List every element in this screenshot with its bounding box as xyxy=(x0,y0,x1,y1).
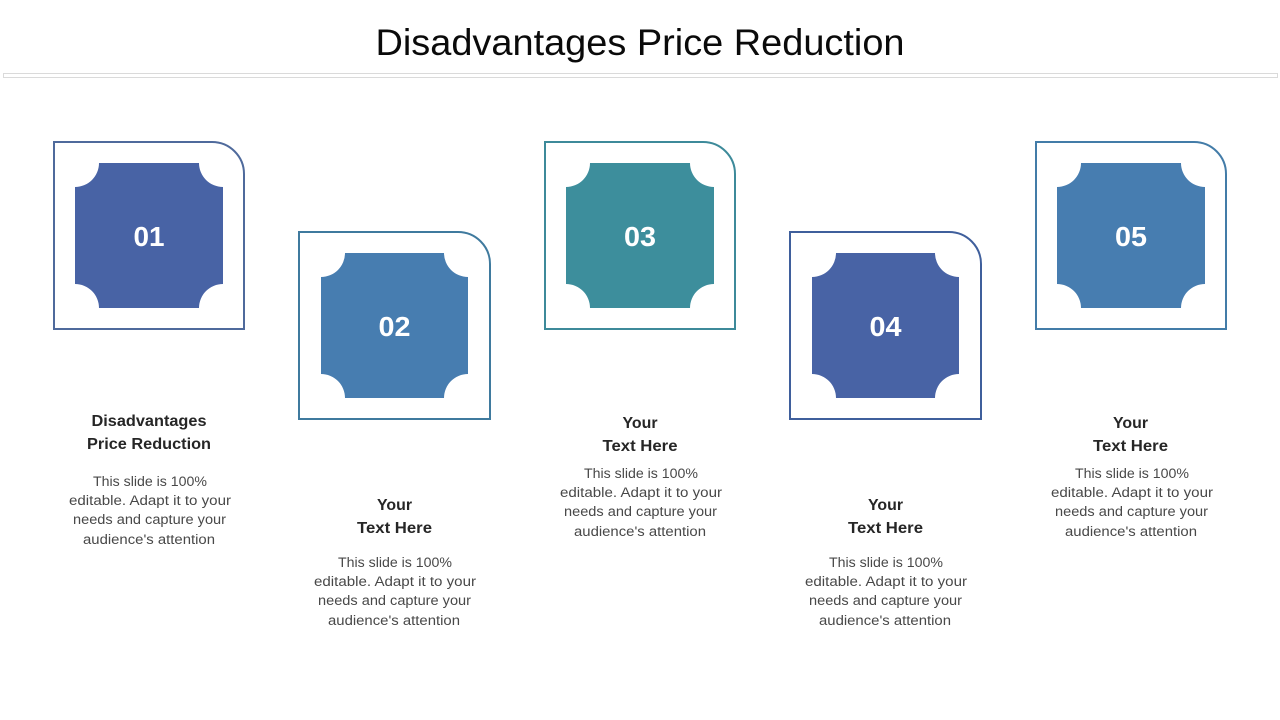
body: step 03: This slide is 100% xyxy=(584,466,698,481)
body: step 04: This slide is 100% xyxy=(829,555,943,570)
heading: step 05 xyxy=(1093,415,1168,455)
badge: step 04 xyxy=(812,253,959,398)
text block: step 02 xyxy=(314,497,477,628)
heading: step 02 xyxy=(357,497,432,537)
badge: step 03 xyxy=(566,163,714,308)
heading: step 02: Your xyxy=(377,497,412,514)
body: step 01: needs and capture your xyxy=(73,512,227,527)
title: Disadvantages Price Reduction xyxy=(376,22,904,63)
number: 03: 03 xyxy=(624,221,656,252)
body: step 04 xyxy=(805,555,968,628)
body: step 01 xyxy=(69,474,232,547)
badge: step 05 xyxy=(1057,163,1205,308)
heading: step 03: Your xyxy=(622,415,658,432)
heading: step 04 xyxy=(848,497,923,537)
body: step 02: audience's attention xyxy=(328,613,460,628)
body: step 02: needs and capture your xyxy=(318,593,472,608)
heading: step 01: Disadvantages xyxy=(92,413,207,430)
number: 01: 01 xyxy=(134,221,164,252)
body: step 03: needs and capture your xyxy=(564,504,718,519)
body: step 05: editable. Adapt it to your xyxy=(1051,485,1214,500)
number: 05: 05 xyxy=(1115,221,1147,252)
number: 04: 04 xyxy=(870,311,902,342)
panel: step 01 xyxy=(54,142,244,329)
text block: step 04 xyxy=(805,497,968,628)
heading: step 01 xyxy=(87,413,211,453)
body: step 03 xyxy=(560,466,723,539)
body: step 04: audience's attention xyxy=(819,613,951,628)
body: step 05: needs and capture your xyxy=(1055,504,1209,519)
frame: step 04 xyxy=(790,232,981,419)
body: step 04: editable. Adapt it to your xyxy=(805,574,968,589)
body: step 02 xyxy=(314,555,477,628)
badge: step 01 xyxy=(75,163,223,308)
body: step 05 xyxy=(1051,466,1214,539)
body: step 05: This slide is 100% xyxy=(1075,466,1189,481)
body: step 03: editable. Adapt it to your xyxy=(560,485,723,500)
panel: step 02 xyxy=(299,232,490,419)
frame: step 01 xyxy=(54,142,244,329)
panel: step 05 xyxy=(1036,142,1226,329)
text block: step 01 xyxy=(69,413,232,547)
body: step 01: audience's attention xyxy=(83,532,215,547)
heading: step 03 xyxy=(602,415,678,455)
body: step 02: editable. Adapt it to your xyxy=(314,574,477,589)
heading: step 04: Text Here xyxy=(848,520,923,537)
body: step 01: editable. Adapt it to your xyxy=(69,493,232,508)
heading: step 03: Text Here xyxy=(602,438,678,455)
body: step 02: This slide is 100% xyxy=(338,555,452,570)
text block: step 03 xyxy=(560,415,723,539)
body: step 04: needs and capture your xyxy=(809,593,963,608)
body: step 03: audience's attention xyxy=(574,524,706,539)
frame: step 05 xyxy=(1036,142,1226,329)
heading: step 02: Text Here xyxy=(357,520,432,537)
badge: step 02 xyxy=(321,253,468,398)
panel: step 03 xyxy=(545,142,735,329)
frame: step 02 xyxy=(299,232,490,419)
body: step 01: This slide is 100% xyxy=(93,474,207,489)
title divider bar xyxy=(4,74,1278,78)
panel: step 04 xyxy=(790,232,981,419)
number: 02: 02 xyxy=(378,311,410,342)
heading: step 01: Price Reduction xyxy=(87,436,211,453)
body: step 05: audience's attention xyxy=(1065,524,1197,539)
heading: step 05: Text Here xyxy=(1093,438,1168,455)
heading: step 04: Your xyxy=(868,497,903,514)
frame: step 03 xyxy=(545,142,735,329)
heading: step 05: Your xyxy=(1113,415,1148,432)
text block: step 05 xyxy=(1051,415,1214,539)
